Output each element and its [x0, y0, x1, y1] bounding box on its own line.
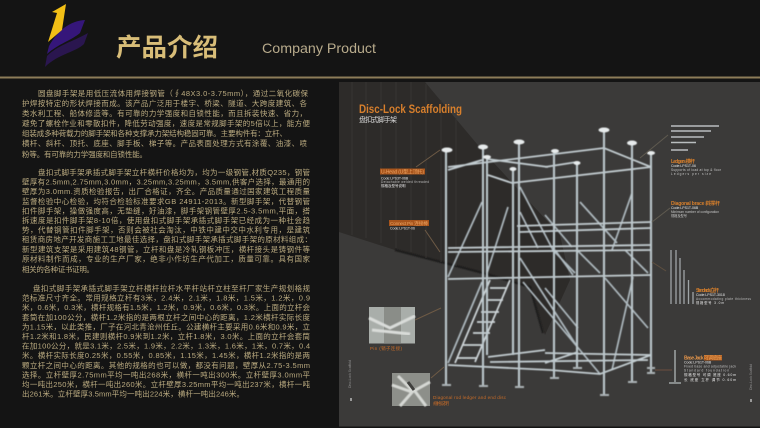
callout: Diagonal brace — [652, 200, 720, 222]
page marks — [348, 360, 753, 402]
heading: Disc-Lock Scaffolding: 盘扣式脚手架 — [359, 115, 397, 124]
callout: Connect Pin: Code:LPS1T-06 — [390, 226, 415, 230]
scaffold structure — [442, 128, 655, 396]
subtitle: Company Product — [262, 40, 376, 56]
callout: Standards: Code:LPS1T-3018 — [696, 293, 725, 297]
diagonal braces — [448, 187, 648, 374]
callout: Base Jack — [655, 350, 736, 383]
callout: Ledgers: Supports of load at top & floor — [671, 168, 722, 172]
callout: Ledgers: Ledgers 横杆 — [671, 158, 695, 165]
callout: Base Jack: Standard foundation — [684, 368, 729, 372]
text block: product description: 粉等。有可靠的力学强度和自锁性能。 — [22, 149, 147, 159]
callout: Ledgers: Ledgers per size — [671, 172, 711, 176]
text block: sizes and weights — [22, 283, 310, 399]
text block: specifications and standards: 租赁商房地产开发商施工工地最佳选择，盘扣式脚手架承插式脚手架的原材料组成： — [22, 234, 312, 244]
callout: Ledgers: Code:LPS1T-06 — [671, 164, 696, 168]
text block: product description: 组装成多种荷载力的脚手架和各种支撑承力架结构稳固可靠。主要构件有：立杆、 — [22, 128, 287, 138]
callout: Base Jack: 规格型号 可调 底座 0.60m — [684, 372, 736, 377]
text block: sizes and weights: 范标准尺寸齐全。常用规格立杆有3米，2.4米，2.1米，1.8米，1.5米，1.2米，0.9 — [22, 293, 310, 303]
text block: sizes and weights: 盘扣式脚手架承插式脚手架立杆横杆拉杆水平杆站杆立柱至杆厂家生产规划格规 — [33, 283, 310, 293]
callout: U-Head — [380, 150, 440, 188]
panel: scaffolding product image — [339, 82, 760, 426]
text block: specifications and standards: 盘扣式脚手架承插式脚手架立杆横杆价格均为，均为一级钢管,材质Q235，钢管 — [38, 167, 310, 177]
callout: U-Head: Code:LPS3T-06B — [381, 176, 409, 180]
vertical standards — [446, 130, 651, 395]
callout: Diagonal brace: Minimum number of configuration — [671, 210, 719, 214]
text block: specifications and standards: 扣件脚手架，操做强度高，无垫缝，好油漆，脚手架钢管壁厚2.5-3.5mm,平面，搭 — [22, 205, 310, 215]
header rule — [0, 76, 760, 78]
callout photo: pin detail — [369, 307, 441, 352]
callout photo: pin detail: Pin (销子连接) — [370, 345, 402, 352]
callout photo: diagonal rod and ledger detail — [392, 367, 507, 407]
callout photo: diagonal rod and ledger detail: 规格说明 — [433, 400, 449, 407]
callout: U-Head: 规格及型号说明 — [381, 183, 406, 188]
text block: product description: 类水利工程、船体修造等。有可靠的力学强度和自锁性能，而且拆装快速、省力， — [22, 108, 307, 118]
text block: specifications and standards — [22, 167, 312, 274]
icon: company logo — [45, 4, 88, 67]
callout: Base Jack: Base Jack 可调底座 — [684, 354, 722, 362]
text block: sizes and weights: 均一吨出250米，横杆一吨出260米。立杆壁厚3.25mm平均一吨出237米，横杆一吨 — [22, 379, 310, 389]
text block: specifications and standards: 原材料制作而成，专业的生产厂家，绝非小作坊生产代加工，质量可靠。具有国家 — [22, 253, 310, 263]
text block: sizes and weights: 米，0.6米，0.3米，横杆规格有1.5米，1.2米，0.9米，0.6米，0.3米。上面的立杆会 — [22, 302, 310, 312]
text block: sizes and weights: 杆1.2米和1.8米，民建则横杆0.9米到1.2米，立杆1.8米，3.0米。上面的立杆会套筒 — [22, 331, 310, 341]
callout: Base Jack: Fixed base and adjustable jack — [684, 364, 736, 368]
text block: specifications and standards: 新型建筑支架是采用建筑48钢管，立杆和盘是冷轧钢板冲压，横杆接头是铸钢件等 — [22, 244, 310, 254]
callout: Diagonal brace: Diagonal brace 斜撑杆 — [671, 200, 720, 207]
callout: Base Jack: Code:LPS1T-06B — [684, 360, 712, 364]
text block: product description: 横杆、斜杆、顶托、底座、脚手板、梯子等。产品表面处理方式有涂覆、油漆、喷 — [22, 138, 308, 148]
callout: Standards: 规格型号 3.0m — [696, 300, 724, 305]
heading: Disc-Lock Scaffolding — [359, 104, 462, 124]
horizontal ledgers — [448, 148, 651, 374]
text block: product description: 圆盘脚手架是用低压流体用焊接钢管（∮48X3.0-3.75mm），通过二氧化碳保 — [38, 88, 308, 98]
callout photo: diagonal rod and ledger detail: Diagonal rod ledger and end disc — [433, 395, 507, 400]
text block: specifications and standards: 壁厚有2.5mm,2.75mm,3.0mm，3.25mm,3.25mm，3.5mm,供客户选择，最通用的 — [22, 177, 310, 187]
text block: sizes and weights: 出261米。立杆壁厚3.5mm平均一吨出224米，横杆一吨出246米。 — [22, 389, 244, 399]
text block: product description: 护焊按特定的形状焊接而成。该产品广泛用于楼宇、桥梁、隧道、大跨度建筑、各 — [22, 98, 308, 108]
callout: Standards: Standards 立杆 — [696, 287, 719, 294]
text block: specifications and standards: 拆速度是扣件脚手架8-10倍，使用盘扣式脚手架承插式脚手架已经成为一种社会趋 — [22, 215, 310, 225]
text block: sizes and weights: 米。横杆实际长度0.25米，0.55米，0.85米，1.15米，1.45米，横杆1.2米指的是两 — [22, 350, 310, 360]
text block: product description: 避免了螺栓作业和零散扣件，降低劳动强度，速度是常规脚手架的5倍以上，能方便 — [22, 118, 310, 128]
text block: sizes and weights: 在加100公分，就是3.1米，2.5米，1.9米，2.2米，1.3米，1.6米，1米，0.7米，0.4 — [22, 341, 310, 351]
text block: specifications and standards: 势，代替钢管扣件脚手架，否则会被社会淘汰，中铁中建中交中水利专用，是建筑 — [22, 225, 310, 235]
page marks: Disc-Lock Scaffold — [749, 364, 753, 390]
page marks: Disc-Lock Scaffold — [348, 360, 352, 388]
callout: Standards — [652, 250, 751, 305]
callout: Connect Pin — [389, 220, 440, 252]
callout: U-Head: U-Head (U型上顶托) — [381, 168, 424, 176]
callout: U-Head: Detachable welded threaded — [381, 180, 429, 184]
text block: specifications and standards: 相关的各种证书证明。 — [22, 264, 94, 274]
callout: Connect Pin: Connect Pin 连接棒 — [390, 220, 428, 227]
text block: sizes and weights: 选择。立杆壁厚2.75mm平均一吨出268米，横杆一吨出300米。立杆壁厚3.0mm平 — [22, 369, 310, 379]
standard heads and base plates — [442, 128, 655, 171]
heading: Disc-Lock Scaffolding: Disc-Lock Scaffolding — [359, 104, 462, 116]
title: 产品介绍 — [116, 34, 218, 62]
callout: Diagonal brace: 规格及型号 — [671, 213, 687, 218]
stairs — [455, 280, 510, 363]
callout: Diagonal brace: Code:LPS1T-06B — [671, 206, 699, 210]
text block: product description — [22, 88, 310, 159]
text block: sizes and weights: 颗立杆之间中心的距离。其他的规格的也可以做，都没有问题，壁厚从2.75-3.5mm — [22, 360, 310, 370]
callout: Standards: Accommodating plate thickness — [696, 297, 751, 301]
text block: specifications and standards: 监督检验中心检验，均符合检验标准要求GB 24911-2013。新型脚手架，代替钢管 — [22, 196, 310, 206]
callout: Base Jack: 长 底座 立杆 调节 0.60m — [684, 377, 736, 382]
text block: specifications and standards: 壁厚为3.0mm.资质检验报告，出厂合格证，齐全。产品质量通过国家建筑工程质量 — [22, 186, 310, 196]
callout: Ledgers — [640, 126, 722, 176]
text block: sizes and weights: 为1.15米，以此类推，厂子在河北青沧州任丘。公建横杆主要采用0.6米和0.9米，立 — [22, 321, 310, 331]
text block: sizes and weights: 套筒在加100公分，横杆1.2米指的是两根立杆之间中心的距离，1.2米横杆实际长度 — [22, 312, 310, 322]
